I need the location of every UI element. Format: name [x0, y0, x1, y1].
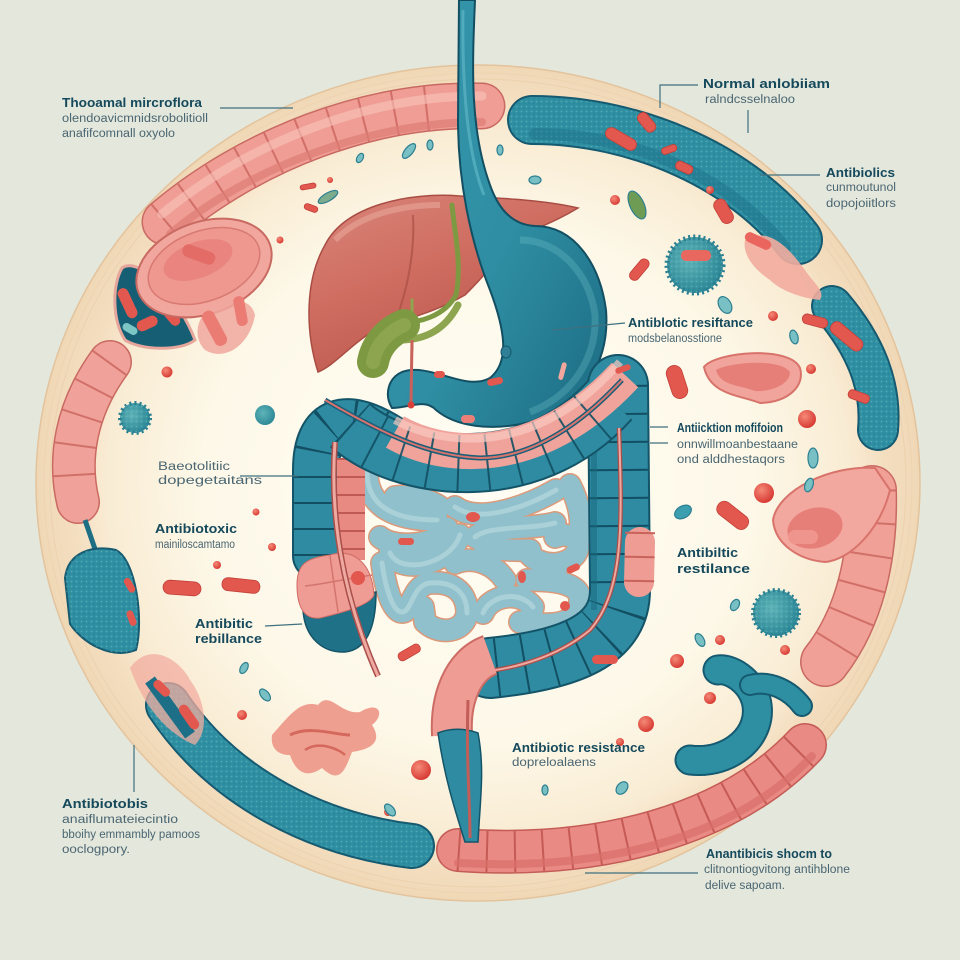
label: antibiotic modification: ond alddhestaqors	[677, 454, 785, 466]
ring: top-left pink intestine	[162, 96, 482, 234]
label: antibiotic modification	[650, 421, 798, 466]
red spherical cells	[162, 177, 816, 816]
right pink burst tissue	[743, 231, 821, 300]
label: top-right: ralndcsselnaloo	[705, 94, 795, 106]
bottom-right teal worm	[690, 670, 802, 761]
bacteria spheres	[120, 237, 799, 636]
sphere lower right	[753, 590, 799, 636]
label: bacteriolithic: Baeotolitiic	[158, 461, 230, 473]
label: bottom-left: anaiflumateiecintio	[62, 814, 178, 826]
label: resistance lower left	[195, 617, 302, 646]
label: bottom-left	[62, 745, 200, 856]
colon red spots	[351, 363, 632, 664]
liver	[309, 195, 578, 372]
sphere upper right	[667, 237, 723, 293]
ring: bottom-left teal intestine	[168, 705, 412, 846]
label: antibiotic resistance by stomach: modsbelanosstione	[628, 333, 722, 345]
label: top-right	[660, 77, 830, 133]
gallbladder and bile ducts	[373, 205, 458, 362]
colon transverse	[350, 362, 625, 463]
label: antibiotic resistance right: restilance	[677, 562, 750, 576]
label: antibiotic resistance right	[677, 546, 750, 576]
label: top-left: Thooamal mircroflora	[62, 96, 203, 110]
label: antibiotic modification: onnwillmoanbestaane	[677, 439, 798, 451]
label: bottom-right: delive sapoam.	[705, 880, 785, 892]
label: antibiotics right: dopojoiitlors	[826, 198, 896, 210]
small intestine	[367, 467, 581, 630]
label: antibiotoxic: mainiloscamtamo	[155, 539, 235, 551]
label: bottom-left: ooclogpory.	[62, 844, 130, 856]
label: bacteriolithic	[158, 461, 298, 487]
small teal and green capsules	[238, 140, 818, 818]
colon left limb	[297, 422, 400, 652]
label: top-left	[62, 96, 293, 140]
top-left cross-section and bacteria cluster	[115, 201, 286, 354]
colon vessel lines	[325, 380, 622, 720]
right cross-section: oval	[704, 353, 801, 403]
label: bottom-left: bboihy emmambly pamoos	[62, 829, 200, 841]
red vessel into duodenum	[408, 340, 414, 408]
fibrous pink microbe	[272, 700, 379, 775]
ring: right pink intestine	[825, 490, 872, 662]
ring: top-right teal intestine	[532, 120, 798, 248]
label: bottom-right: Anantibicis shocm to	[706, 847, 832, 861]
label: resistance bottom centre	[512, 741, 645, 769]
label: top-left: anafifcomnall oxyolo	[62, 128, 175, 140]
left teal pouch	[65, 520, 139, 653]
label: antibiotoxic: Antibiotoxic	[155, 522, 237, 536]
right cross-section: large	[773, 468, 890, 562]
label: antibiotics right: Antibiolics	[826, 166, 895, 180]
small intestine red dots	[398, 512, 581, 611]
colon pink lower section and rectum	[438, 655, 490, 842]
label: antibiotic resistance by stomach	[552, 316, 753, 345]
teal ball	[255, 405, 275, 425]
red rod bacteria	[163, 110, 871, 662]
label: resistance lower left: rebillance	[195, 632, 262, 646]
colon	[297, 362, 640, 842]
sphere left	[120, 403, 150, 433]
label: bottom-right: clitnontiogvitong antihblone	[704, 864, 850, 876]
label: antibiotic resistance by stomach: Antiblotic resiftance	[628, 316, 753, 330]
colon right limb and lower band	[490, 385, 640, 668]
label: antibiotics right	[760, 166, 896, 210]
label: bottom-right	[585, 847, 850, 892]
label: antibiotics right: cunmoutunol	[826, 182, 896, 194]
ring: bottom pink intestine	[458, 745, 812, 864]
label: top-left: olendoavicmnidsrobolitioll	[62, 113, 208, 125]
ring: left pink intestine	[74, 362, 110, 502]
pink bursts bottom-left	[130, 654, 204, 745]
esophagus and stomach	[388, 0, 606, 427]
label: antibiotoxic	[155, 522, 237, 551]
label: antibiotic modification: Antiicktion mofifoion	[677, 421, 783, 435]
label: resistance bottom centre: dopreloalaens	[512, 757, 596, 769]
label: resistance lower left: Antibitic	[195, 617, 253, 631]
label: bacteriolithic: dopegetaitans	[158, 475, 262, 487]
label: resistance bottom centre: Antibiotic resistance	[512, 741, 645, 755]
label: bottom-left: Antibiotobis	[62, 797, 148, 811]
label: antibiotic resistance right: Antibiltic	[677, 546, 738, 560]
label: top-right: Normal anlobiiam	[703, 77, 830, 91]
ring: right teal segment	[832, 306, 879, 430]
